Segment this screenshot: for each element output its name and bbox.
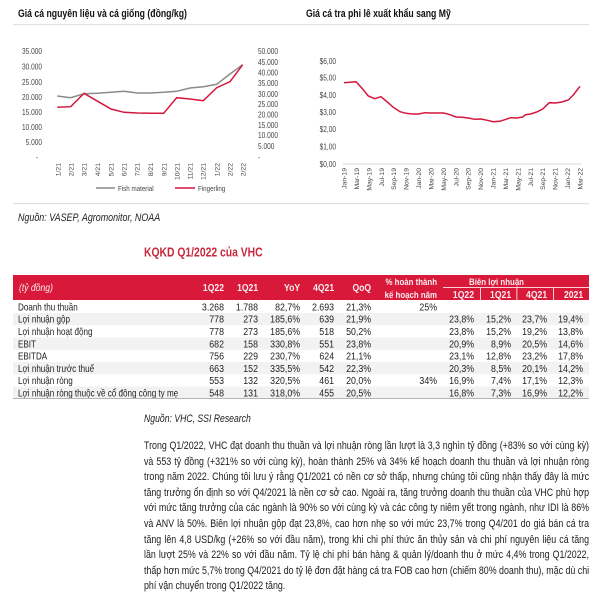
row: net profit attributable to parent: 16,8% bbox=[449, 388, 474, 400]
text block: commentary: trong năm 2022. Chúng tôi lưu ý rằng Q1/2021 có nền cơ sở thấp, nhưng chúng tôi cũng nhận thấy đây là mức bbox=[144, 471, 589, 483]
month labels: 12/21 bbox=[200, 163, 208, 180]
table header row: YoY bbox=[284, 282, 301, 294]
table header row: kế hoạch năm bbox=[385, 289, 437, 300]
month labels: 2/22 bbox=[228, 163, 234, 176]
month labels: 8/21 bbox=[148, 163, 155, 176]
text block: commentary: tăng lên 4,8 USD/kg (+26% so với đầu năm), trong khi chi phí thức ăn thủy sản và chi phí nguyên liệu cá tăng bbox=[144, 534, 589, 546]
row: net profit attributable to parent: 16,9% bbox=[522, 388, 547, 400]
row: EBITDA bbox=[18, 351, 583, 363]
table header row: 1Q21 bbox=[490, 289, 512, 301]
left axis labels bbox=[22, 46, 42, 162]
row: EBIT: 20,5% bbox=[522, 339, 547, 351]
text block: commentary: và ANV là 50%. Biên lợi nhuận gộp đạt 23,8%, cao hơn nhẹ so với mức 23,7% trong Q4/201 do giá bán cá tra bbox=[144, 518, 589, 530]
month labels: 7/21 bbox=[134, 163, 142, 176]
month labels: 11/21 bbox=[188, 163, 194, 180]
row: EBIT: 20,9% bbox=[449, 339, 474, 351]
text block: commentary: và 553 tỷ đồng (+321% so với cùng kỳ), hoàn thành 25% và 34% kế hoạch doanh thu thuần và lợi nhuận ròng bbox=[144, 456, 589, 468]
row: profit before tax bbox=[18, 363, 583, 375]
right axis labels: 40.000 bbox=[258, 68, 278, 78]
date labels: Jan-22 bbox=[565, 168, 572, 189]
row: gross profit: Lợi nhuận gộp bbox=[18, 314, 70, 325]
row: gross profit: 21,9% bbox=[346, 314, 371, 326]
line: fish material bbox=[57, 65, 243, 98]
row: net revenue: Doanh thu thuần bbox=[18, 302, 78, 313]
price axis labels: $5,00 bbox=[320, 73, 336, 83]
month labels: 2/22 bbox=[240, 163, 248, 176]
table header row: 1Q22 bbox=[203, 282, 224, 294]
left axis labels: 5.000 bbox=[26, 137, 42, 147]
source note: table: Nguồn: VHC, SSI Research bbox=[144, 413, 251, 425]
row: EBITDA: 17,8% bbox=[558, 351, 583, 363]
price axis labels: $1,00 bbox=[320, 142, 336, 152]
right axis labels: 20.000 bbox=[258, 110, 278, 120]
table heading: KQKD Q1/2022 của VHC bbox=[144, 247, 263, 260]
date labels: Jul-21 bbox=[528, 168, 535, 187]
row: profit before tax: 14,2% bbox=[558, 363, 583, 375]
date labels: Mar-20 bbox=[428, 168, 435, 190]
left axis labels: 10.000 bbox=[22, 122, 42, 132]
date labels: Mar-22 bbox=[578, 168, 584, 190]
row: net profit: 12,3% bbox=[558, 375, 583, 387]
right axis labels: 35.000 bbox=[258, 78, 278, 88]
row: EBITDA: 21,1% bbox=[346, 351, 371, 363]
row: gross profit: 778 bbox=[209, 314, 224, 326]
month labels: 4/21 bbox=[95, 163, 102, 176]
left axis labels: - bbox=[36, 152, 39, 162]
row: EBITDA: EBITDA bbox=[18, 351, 48, 362]
table header row: 4Q21 bbox=[526, 289, 548, 301]
row: net profit: 20,0% bbox=[346, 375, 371, 387]
row: net profit attributable to parent: 131 bbox=[243, 388, 258, 400]
row: operating profit: 23,8% bbox=[449, 326, 474, 338]
source note: charts: Nguồn: VASEP, Agromonitor, NOAA bbox=[18, 212, 160, 224]
row: EBITDA: 12,8% bbox=[486, 351, 511, 363]
row: net profit: 461 bbox=[319, 375, 334, 387]
row: net profit: 320,5% bbox=[270, 375, 300, 387]
row: operating profit: 273 bbox=[243, 326, 258, 338]
date labels: Jul-20 bbox=[453, 168, 460, 187]
row: EBITDA: 230,7% bbox=[270, 351, 300, 363]
row: operating profit: 778 bbox=[209, 326, 224, 338]
row: net profit attributable to parent: 7,3% bbox=[491, 388, 511, 400]
row: net profit attributable to parent: 455 bbox=[319, 388, 334, 400]
left axis labels: 30.000 bbox=[22, 62, 42, 72]
row: EBITDA: 23,2% bbox=[522, 351, 547, 363]
panel: raw material and fingerling price chart bbox=[13, 8, 300, 204]
row: profit before tax: Lợi nhuận trước thuế bbox=[18, 363, 95, 374]
right axis labels: - bbox=[258, 152, 261, 162]
row: profit before tax: 663 bbox=[209, 363, 224, 375]
row: EBIT: 682 bbox=[209, 339, 224, 351]
date labels: Jan-21 bbox=[490, 168, 498, 189]
row: net profit bbox=[18, 375, 583, 387]
left axis labels: 25.000 bbox=[22, 77, 42, 87]
row: profit before tax: 8,5% bbox=[491, 363, 511, 375]
row: profit before tax: 542 bbox=[319, 363, 334, 375]
row: net profit attributable to parent: 12,2% bbox=[558, 388, 583, 400]
month labels: 5/21 bbox=[108, 163, 116, 176]
heading: raw material chart title: Giá cá nguyên liệu và cá giống (đồng/kg) bbox=[18, 8, 187, 20]
date labels: Nov-21 bbox=[553, 168, 560, 190]
row: net revenue: 1.788 bbox=[236, 302, 258, 314]
right axis labels: 30.000 bbox=[258, 89, 278, 99]
month labels: 6/21 bbox=[122, 163, 128, 176]
row: net profit attributable to parent: Lợi nhuận ròng thuộc về cổ đông công ty mẹ bbox=[18, 387, 178, 399]
date labels: Jan-19 bbox=[342, 168, 348, 189]
row: EBIT: EBIT bbox=[18, 338, 36, 350]
month labels: 1/21 bbox=[56, 163, 62, 176]
heading: export price chart title: Giá cá tra phi lê xuất khẩu sang Mỹ bbox=[306, 8, 451, 20]
row: operating profit: 50,2% bbox=[346, 326, 371, 338]
date labels: Nov-19 bbox=[404, 168, 411, 190]
left axis labels: 15.000 bbox=[22, 107, 42, 117]
table header row: Biên lợi nhuận bbox=[469, 276, 524, 287]
row: profit before tax: 20,1% bbox=[522, 363, 547, 375]
text block: commentary: với mức tăng trưởng của các ngành là 90% so với cùng kỳ và các công ty niêm yết trong ngành, như IDI là 86% bbox=[144, 502, 589, 514]
row: gross profit: 185,6% bbox=[270, 314, 300, 326]
table header row: 1Q21 bbox=[237, 282, 259, 294]
legend bbox=[96, 186, 225, 193]
row: gross profit: 19,4% bbox=[558, 314, 583, 326]
row: operating profit bbox=[18, 326, 583, 338]
table header row: % hoàn thành bbox=[385, 276, 437, 287]
row: net profit: 7,4% bbox=[491, 375, 511, 387]
row: EBIT: 551 bbox=[319, 339, 334, 351]
row: operating profit: 518 bbox=[319, 326, 334, 338]
row: net revenue: 82,7% bbox=[275, 302, 300, 314]
row: net profit: 16,9% bbox=[449, 375, 474, 387]
price axis labels: $3,00 bbox=[320, 107, 336, 117]
left axis labels: 35.000 bbox=[22, 46, 42, 56]
legend: Fish material bbox=[118, 186, 154, 193]
row: operating profit: 13,8% bbox=[558, 326, 583, 338]
right axis labels: 45.000 bbox=[258, 57, 278, 67]
row: EBIT: 14,6% bbox=[558, 339, 583, 351]
date labels: Jan-20 bbox=[416, 168, 423, 189]
row: net revenue bbox=[18, 302, 437, 314]
date labels: May-21 bbox=[515, 168, 522, 191]
row: operating profit: Lợi nhuận hoạt động bbox=[18, 326, 92, 337]
right axis labels: 50.000 bbox=[258, 46, 278, 56]
row: EBIT: 8,9% bbox=[491, 339, 511, 351]
date labels: Nov-20 bbox=[478, 168, 485, 190]
row: net profit attributable to parent: 548 bbox=[209, 388, 224, 400]
price axis labels: $4,00 bbox=[320, 90, 336, 100]
price axis labels: $6,00 bbox=[320, 56, 336, 66]
text block: commentary bbox=[144, 440, 590, 592]
date labels: Sep-20 bbox=[466, 168, 473, 190]
row: EBIT: 158 bbox=[243, 339, 258, 351]
row: EBIT: 330,8% bbox=[270, 339, 300, 351]
date labels: Mar-21 bbox=[503, 168, 510, 190]
date labels: May-19 bbox=[366, 168, 373, 191]
row: net revenue: 21,3% bbox=[346, 302, 371, 314]
row: operating profit: 19,2% bbox=[522, 326, 547, 338]
row: profit before tax: 152 bbox=[243, 363, 258, 375]
month labels: 10/21 bbox=[174, 163, 182, 180]
right axis labels: 10.000 bbox=[258, 130, 278, 140]
right axis labels: 5.000 bbox=[258, 141, 274, 151]
row: EBITDA: 23,1% bbox=[449, 351, 474, 363]
row: gross profit: 23,7% bbox=[522, 314, 547, 326]
row: profit before tax: 335,5% bbox=[270, 363, 300, 375]
date labels: Jul-19 bbox=[379, 168, 386, 187]
month labels bbox=[56, 163, 248, 180]
month labels: 1/22 bbox=[214, 163, 222, 176]
date labels: Mar-19 bbox=[354, 168, 361, 190]
line: export price bbox=[344, 82, 580, 122]
row: net revenue: 3.268 bbox=[202, 302, 224, 314]
right axis labels: 25.000 bbox=[258, 99, 278, 109]
line: fingerling bbox=[57, 65, 243, 113]
text block: commentary: thấp hơn mức 5,7% trong Q4/2021 do tỷ lệ đơn đặt hàng cá tra FOB cao hơn (chiếm 80% doanh thu), mặc dù chi bbox=[144, 565, 589, 577]
row: net profit: Lợi nhuận ròng bbox=[18, 375, 73, 386]
left axis labels: 20.000 bbox=[22, 92, 42, 102]
row: EBITDA: 624 bbox=[319, 351, 335, 363]
row: EBITDA: 756 bbox=[209, 351, 224, 363]
row: gross profit: 15,2% bbox=[486, 314, 511, 326]
row stripes bbox=[13, 313, 589, 398]
row: gross profit bbox=[18, 314, 583, 326]
table header row: 4Q21 bbox=[313, 282, 335, 294]
row: net profit attributable to parent: 318,0% bbox=[270, 388, 300, 400]
date labels bbox=[342, 168, 584, 191]
row: profit before tax: 20,3% bbox=[449, 363, 474, 375]
legend: Fingerling bbox=[198, 186, 225, 193]
row: net profit: 17,1% bbox=[522, 375, 547, 387]
price axis labels bbox=[320, 56, 336, 169]
row: gross profit: 639 bbox=[319, 314, 334, 326]
text block: commentary: phí vận chuyển trong Q1/2022 tăng. bbox=[144, 580, 285, 592]
row: net revenue: 25% bbox=[419, 302, 437, 314]
row: net profit attributable to parent bbox=[18, 387, 583, 400]
row: EBIT bbox=[18, 338, 583, 351]
row: gross profit: 23,8% bbox=[449, 314, 474, 326]
text block: commentary: Trong Q1/2022, VHC đạt doanh thu thuần và lợi nhuận ròng lần lượt là 3,3 nghìn tỷ đồng (+83% so với cùng kỳ) bbox=[144, 440, 589, 452]
table header row: 2021 bbox=[564, 289, 584, 301]
right axis labels: 15.000 bbox=[258, 120, 278, 130]
row: EBIT: 23,8% bbox=[346, 339, 371, 351]
row: net revenue: 2.693 bbox=[312, 302, 334, 314]
table header row: (tỷ đồng) bbox=[19, 282, 53, 294]
row: net profit: 34% bbox=[419, 375, 437, 387]
row: net profit attributable to parent: 20,5% bbox=[346, 388, 371, 400]
table header row: QoQ bbox=[352, 282, 372, 294]
date labels: May-20 bbox=[441, 168, 448, 191]
panel: US export fillet price chart bbox=[300, 8, 589, 204]
price axis labels: $2,00 bbox=[320, 124, 336, 134]
text block: commentary: lần lượt 25% và 22% so với đầu năm. Tỷ lệ chi phí bán hàng & quản lý/doanh thu ở mức 4,4% trong Q1/2022, bbox=[144, 549, 589, 561]
row: EBITDA: 229 bbox=[243, 351, 258, 363]
price axis labels: $0,00 bbox=[320, 159, 336, 169]
right axis labels bbox=[258, 46, 278, 162]
text block: commentary: tăng trưởng ổn định so với Q4/2021 là nền cơ sở cao. Ngoài ra, tăng trưởng doanh thu thuần của VHC phù hợp bbox=[144, 487, 589, 499]
table header row: 1Q22 bbox=[453, 289, 474, 301]
month labels: 2/21 bbox=[68, 163, 76, 176]
table header row bbox=[13, 275, 589, 301]
row: operating profit: 15,2% bbox=[486, 326, 511, 338]
row: operating profit: 185,6% bbox=[270, 326, 300, 338]
row: net profit: 553 bbox=[209, 375, 224, 387]
month labels: 3/21 bbox=[82, 163, 88, 176]
date labels: Sep-21 bbox=[540, 168, 547, 190]
row: profit before tax: 22,3% bbox=[346, 363, 371, 375]
table: VHC Q1/2022 results bbox=[13, 275, 589, 400]
row: gross profit: 273 bbox=[243, 314, 258, 326]
date labels: Sep-19 bbox=[391, 168, 398, 190]
row: net profit: 132 bbox=[243, 375, 258, 387]
month labels: 9/21 bbox=[162, 163, 168, 176]
